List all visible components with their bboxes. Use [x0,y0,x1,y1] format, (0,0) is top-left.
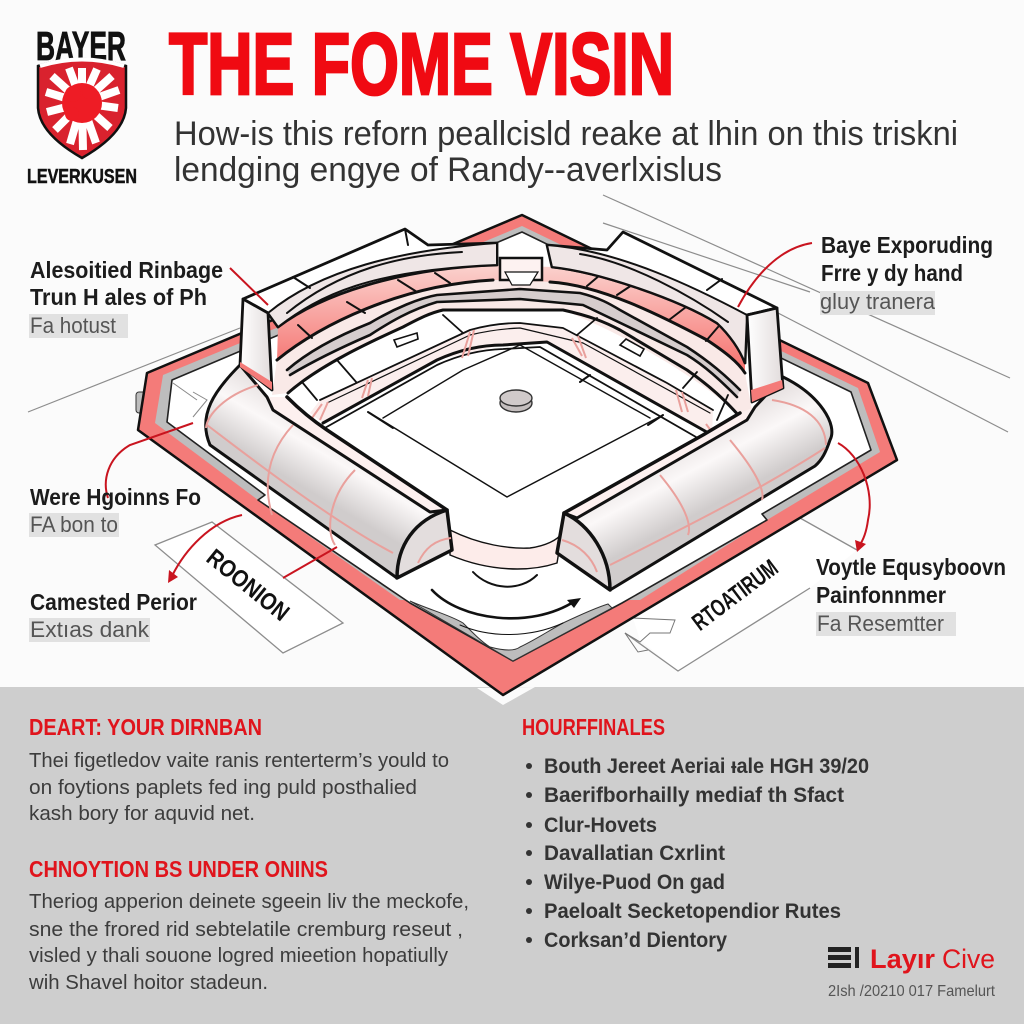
text block: second section: Theriog apperion deinete sgeein liv the meckofe, [29,891,469,913]
icon: stacked bars [828,947,859,968]
title: THE FOME VISIN [169,16,674,113]
bullet list: hourffinales: Baerifborhailly mediaf th Sfact [544,784,844,807]
footer logo: Cive [942,944,995,974]
label: bottom left: Extıas dank [30,617,150,642]
stadium illustration [138,215,897,695]
bullet list: hourffinales: HOURFFINALES [522,714,665,740]
upper right stand roof [547,232,783,402]
stadium gray inner band [155,226,880,600]
arrow on walkway [567,598,581,608]
label: top right [820,232,993,315]
callout arrow: right [838,443,870,552]
logo: Bayer Leverkusen crest: BAYER [36,23,126,69]
inner bowl upper terraces [272,265,752,420]
left ground parcel with label: ROONION [201,544,294,627]
seating upper edge [278,265,745,363]
bowl lower edge right [564,407,755,518]
text block: second section [28,856,469,994]
text block: second section: sne the frored rid sebtelatile cremburg reseut , [29,919,463,941]
text block: first section: kash bory for aquvid net. [29,803,255,825]
text block: first section: Thei figetledov vaite ranis renterterm’s yould to [29,750,449,772]
label: bottom right: Painfonnmer [816,582,946,608]
subtitle: How-is this reforn peallcisld reake at lhin on this triskni [174,115,958,153]
callout stub: bottom left [283,547,337,578]
right ground parcel with label [625,518,857,671]
bottom-right curved stand [557,377,832,590]
gray tab on left corner [136,392,146,413]
centre circle [500,390,532,412]
label: top left: Fa hotust [30,313,116,338]
label: top right: Frre y dy hand [821,260,963,286]
label: top left: Alesoitied Rinbage [30,257,223,283]
text block: second section: wih Shavel hoitor stadeun. [28,972,268,994]
bullet list: hourffinales: Bouth Jereet Aeriai ᵼale HGH 39/20 [544,755,869,778]
right ground parcel with label: RTOATIRUM [687,555,783,636]
pitch [323,342,712,510]
footer logo: 2Ish /20210 017 Famelurt [828,983,996,1000]
label: top left [29,257,223,338]
label: bottom left [29,589,197,642]
red seating band [277,265,745,373]
label: top right: Baye Exporuding [821,232,993,258]
logo: Bayer Leverkusen crest: LEVERKUSEN [27,166,137,188]
callout line: top left [230,268,268,305]
stadium concourse floor [167,232,871,661]
front centre curved walkway [432,530,581,635]
bullet list: hourffinales [522,714,869,952]
footer logo [828,944,996,1000]
bullet list: hourffinales: Wilye-Puod On gad [544,871,725,894]
left ground parcel with label [155,522,343,653]
label: middle left [29,484,201,537]
bottom-centre gray strip [410,601,612,661]
text block: first section: DEART: YOUR DIRNBAN [29,714,262,740]
pale terrace band [272,280,752,417]
inner rim and seating rails [310,323,713,437]
bullet list: hourffinales: Corksan’d Dientory [544,929,727,952]
callout line: top right [738,243,812,307]
window right [620,339,644,356]
label: middle left: Were Hgoinns Fo [30,484,201,510]
label: bottom left: Camested Perior [30,589,197,615]
small outline on left concourse [173,383,207,417]
central upper stand building [500,258,542,285]
text block: second section: CHNOYTION BS UNDER ONINS [29,856,328,882]
bullet list: hourffinales: Clur-Hovets [544,814,657,837]
terrace radial dividers [302,315,728,420]
footer logo: Layır [870,944,935,974]
white tip below the stadium [477,687,535,705]
background site lines [28,195,1010,432]
label: bottom right: Fa Resemtter [817,611,944,636]
bullet list: hourffinales: Paeloalt Secketopendior Rutes [544,900,841,923]
right stand end cap [557,513,610,590]
subtitle [174,115,958,189]
text block: first section: on foytions paplets fed ing puld posthalied [29,777,417,799]
subtitle: lendging engye of Randy--averlxislus [174,151,722,189]
bowl lower edge left [267,397,447,512]
callout line: middle left [106,423,193,498]
panel: lower information background [0,687,1024,1024]
window left [394,333,418,347]
bullet list: hourffinales: Davallatian Cxrlint [544,842,725,865]
logo: Bayer Leverkusen crest [27,23,137,188]
label: top left: Trun H ales of Ph [30,284,207,310]
label: bottom right [816,554,1006,636]
stadium outer red band [138,215,897,695]
label: bottom right: Voytle Equsyboovn [816,554,1006,580]
seating seams [298,273,718,341]
text block: second section: visled y thali souone logred mieetion hopatiully [29,945,448,967]
left stand end cap [397,510,452,578]
label: top right: gluy tranera [820,289,936,314]
gray terrace band [287,289,740,397]
upper left stand roof [240,229,497,390]
text block: first section [29,714,449,825]
bottom-left curved stand [206,365,452,578]
label: middle left: FA bon to [30,512,118,537]
callout arrow: bottom left [168,515,242,583]
